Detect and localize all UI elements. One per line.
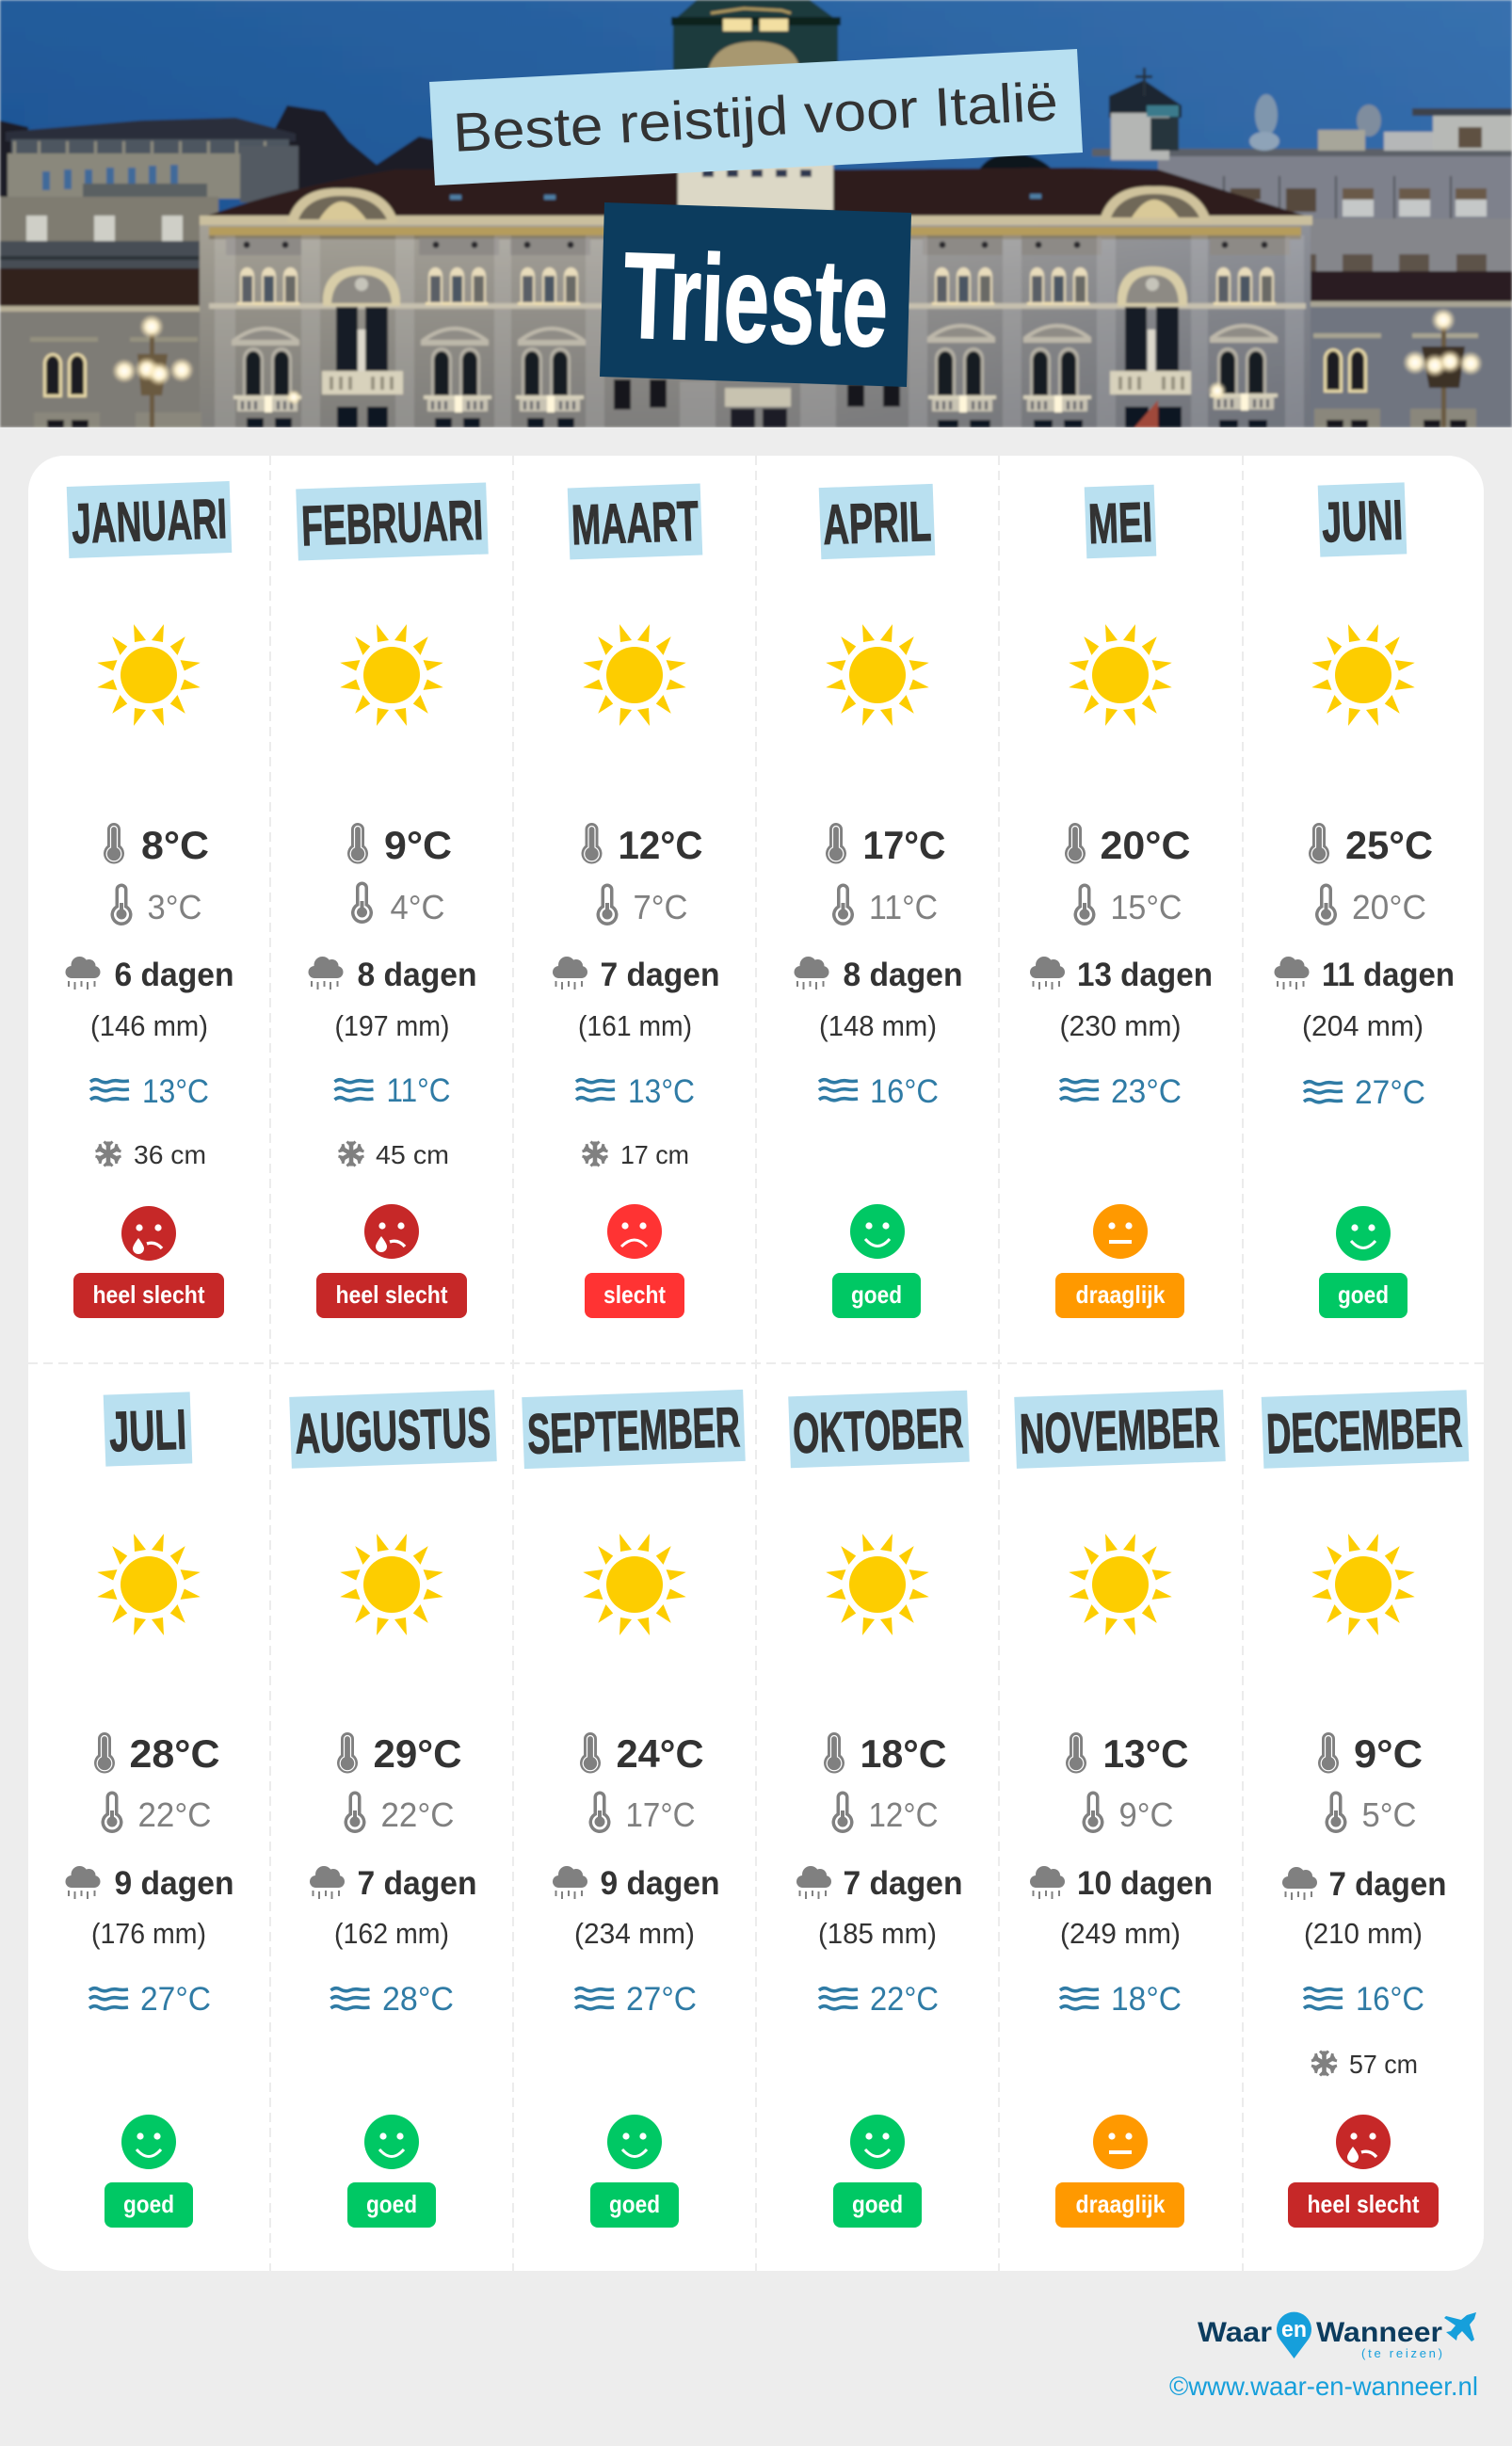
- panel: juli: [66, 1392, 233, 2228]
- sea temperature: [335, 1072, 450, 1109]
- sea temperature: 16°C: [1356, 1981, 1424, 2018]
- logo: Waar en Wanneer: Wanneer: [1316, 2317, 1442, 2348]
- min temperature: [597, 883, 687, 926]
- panel: december: [1262, 1390, 1469, 2228]
- max temperature: 24°C: [616, 1731, 704, 1776]
- max temperature: [104, 823, 209, 867]
- rainfall: (210 mm): [1304, 1917, 1423, 1950]
- panel: climate table card: [28, 456, 1484, 2271]
- rating face: [850, 2115, 905, 2169]
- icon: sun: [1311, 624, 1415, 726]
- max temperature: 9°C: [384, 823, 452, 867]
- subtitle banner: [429, 49, 1083, 185]
- min temperature: 22°C: [137, 1795, 211, 1834]
- icon: sun: [1069, 624, 1172, 726]
- icon: sun: [340, 624, 443, 726]
- min temperature: [102, 1791, 211, 1834]
- logo: Waar en Wanneer: (te reizen): [1361, 2346, 1442, 2360]
- panel: november: [1014, 1390, 1226, 2228]
- title banner: [600, 202, 911, 387]
- rating badge: [1055, 1273, 1184, 1318]
- rating badge: [105, 2182, 193, 2228]
- month label: augustus: AUGUSTUS: [294, 1395, 491, 1466]
- rating badge: draaglijk: [1075, 1280, 1166, 1309]
- min temperature: 20°C: [1352, 888, 1426, 926]
- sea temperature: [331, 1981, 454, 2018]
- rating badge: [832, 1273, 921, 1318]
- rating face: [1336, 2115, 1391, 2169]
- rainfall: (185 mm): [818, 1917, 937, 1950]
- sea temperature: 23°C: [1111, 1073, 1182, 1110]
- snow: 45 cm: [376, 1140, 449, 1169]
- rain days: 13 dagen: [1077, 957, 1213, 993]
- panel: maart: [553, 484, 719, 1318]
- rain days: 8 dagen: [358, 957, 476, 993]
- month label: november: [1014, 1390, 1226, 1469]
- sea temperature: 27°C: [140, 1981, 211, 2018]
- min temperature: 22°C: [380, 1795, 454, 1834]
- month label: juli: [104, 1392, 192, 1467]
- rating badge: goed: [851, 1280, 902, 1309]
- rating face: [364, 1204, 419, 1259]
- min temperature: 5°C: [1361, 1795, 1416, 1834]
- rating badge: [73, 1273, 224, 1318]
- rating face: [121, 1206, 176, 1261]
- rating badge: [1055, 2182, 1184, 2228]
- rainfall: (162 mm): [334, 1917, 449, 1950]
- rain days: [1282, 1866, 1446, 1903]
- min temperature: [589, 1791, 695, 1834]
- max temperature: [826, 823, 945, 867]
- max temperature: [1066, 1731, 1188, 1776]
- sea temperature: [1304, 1074, 1425, 1111]
- max temperature: 20°C: [1100, 823, 1190, 867]
- max temperature: 25°C: [1345, 823, 1433, 867]
- rain days: 7 dagen: [844, 1865, 962, 1902]
- snow: [582, 1140, 689, 1169]
- sea temperature: 18°C: [1111, 1981, 1182, 2018]
- min temperature: [1083, 1791, 1173, 1834]
- rainfall: (249 mm): [1060, 1917, 1181, 1950]
- rain days: 8 dagen: [844, 957, 962, 993]
- rating badge: goed: [609, 2190, 660, 2218]
- max temperature: [582, 823, 702, 867]
- panel: augustus: [289, 1390, 497, 2228]
- min temperature: 9°C: [1118, 1795, 1173, 1834]
- icon: sun: [583, 624, 686, 726]
- icon: sun: [583, 1534, 686, 1635]
- rain days: 7 dagen: [1329, 1866, 1446, 1903]
- snow: [95, 1140, 206, 1169]
- month label: juni: JUNI: [1321, 489, 1404, 554]
- rain days: 9 dagen: [601, 1865, 719, 1902]
- rating badge: heel slecht: [1307, 2190, 1420, 2218]
- max temperature: [347, 823, 452, 867]
- panel: januari: [66, 481, 233, 1318]
- logo: Waar en Wanneer: [1198, 2312, 1476, 2360]
- snow: 36 cm: [134, 1140, 206, 1169]
- icon: map pin: [1277, 2312, 1311, 2358]
- sea temperature: [1304, 1981, 1424, 2018]
- min temperature: [832, 883, 938, 926]
- rain days: 7 dagen: [601, 957, 719, 993]
- rating badge: goed: [123, 2190, 174, 2218]
- month label: februari: FEBRUARI: [300, 489, 484, 557]
- sea temperature: 27°C: [626, 1981, 697, 2018]
- max temperature: 13°C: [1103, 1731, 1188, 1776]
- month label: maart: MAART: [571, 490, 700, 556]
- month label: oktober: OKTOBER: [792, 1396, 964, 1465]
- rating badge: heel slecht: [335, 1280, 448, 1309]
- month label: oktober: [788, 1391, 970, 1468]
- max temperature: 18°C: [861, 1731, 947, 1776]
- month label: mei: [1085, 485, 1156, 558]
- rating face: [1336, 1206, 1391, 1261]
- rating face: [607, 1204, 662, 1259]
- rating badge: draaglijk: [1075, 2190, 1166, 2218]
- rating badge: [1288, 2182, 1439, 2228]
- min temperature: 11°C: [869, 888, 938, 926]
- sea temperature: [89, 1981, 211, 2018]
- sea temperature: 28°C: [382, 1981, 454, 2018]
- sea temperature: [576, 1073, 695, 1110]
- max temperature: 29°C: [373, 1731, 461, 1776]
- month label: januari: JANUARI: [71, 487, 228, 555]
- rain days: [553, 1865, 719, 1902]
- rating face: [607, 2115, 662, 2169]
- rainfall: (234 mm): [574, 1917, 695, 1950]
- rainfall: (146 mm): [90, 1009, 208, 1042]
- panel: oktober: [788, 1391, 970, 2228]
- rain days: [310, 1865, 476, 1902]
- rain days: 11 dagen: [1322, 957, 1455, 993]
- min temperature: 12°C: [868, 1795, 938, 1834]
- month label: maart: [568, 484, 702, 559]
- rain days: [66, 957, 233, 993]
- min temperature: 17°C: [625, 1795, 695, 1834]
- sea temperature: [819, 1981, 939, 2018]
- panel: juni: [1275, 482, 1455, 1318]
- sea temperature: [1060, 1073, 1182, 1110]
- min temperature: [1315, 883, 1426, 926]
- sea temperature: [90, 1073, 209, 1110]
- min temperature: [1326, 1791, 1416, 1834]
- month label: november: NOVEMBER: [1019, 1395, 1220, 1466]
- rain days: [795, 957, 962, 993]
- sea temperature: 13°C: [628, 1073, 695, 1110]
- icon: sun: [340, 1534, 443, 1635]
- sea temperature: 27°C: [1355, 1074, 1425, 1111]
- min temperature: [1073, 883, 1182, 926]
- min temperature: 3°C: [147, 888, 201, 926]
- rainfall: (176 mm): [91, 1917, 206, 1950]
- min temperature: 4°C: [390, 888, 444, 926]
- rain days: 7 dagen: [358, 1865, 476, 1902]
- rating face: [364, 2115, 419, 2169]
- rating badge: [1319, 1273, 1407, 1318]
- min temperature: [345, 1791, 454, 1834]
- max temperature: [824, 1731, 947, 1776]
- icon: sun: [826, 1534, 929, 1635]
- month label: augustus: [289, 1390, 497, 1469]
- rating badge: [585, 1273, 684, 1318]
- icon: sun: [97, 1534, 201, 1635]
- rating badge: goed: [852, 2190, 903, 2218]
- month label: april: APRIL: [822, 490, 932, 556]
- panel: april: [795, 484, 962, 1318]
- sea temperature: [1060, 1981, 1182, 2018]
- month label: februari: [296, 482, 489, 561]
- icon: sun: [97, 624, 201, 726]
- rain days: [553, 957, 719, 993]
- logo: Waar en Wanneer: Waar: [1198, 2317, 1272, 2348]
- website credit: ©www.waar-en-wanneer.nl: [1169, 2372, 1478, 2401]
- month label: juni: [1318, 482, 1407, 557]
- rain days: [66, 1865, 233, 1902]
- snow: [1311, 2050, 1418, 2079]
- panel: september: [522, 1390, 746, 2228]
- rating face: [1093, 1204, 1148, 1259]
- rating badge: heel slecht: [92, 1280, 205, 1309]
- month label: mei: MEI: [1087, 491, 1153, 555]
- header photo: Piazza Unità building at dusk: [0, 0, 1512, 427]
- sea temperature: [819, 1073, 939, 1110]
- rainfall: (204 mm): [1302, 1009, 1424, 1042]
- rain days: 6 dagen: [115, 957, 233, 993]
- rainfall: (161 mm): [578, 1009, 692, 1042]
- max temperature: 12°C: [618, 823, 702, 867]
- subtitle text: Beste reistijd voor Italië: [452, 71, 1059, 164]
- month label: september: SEPTEMBER: [526, 1395, 741, 1466]
- sea temperature: 22°C: [870, 1981, 939, 2018]
- rating badge: [590, 2182, 679, 2228]
- rating badge: goed: [366, 2190, 417, 2218]
- rating badge: goed: [1338, 1280, 1389, 1309]
- title text: Trieste: Trieste: [621, 226, 891, 373]
- rating badge: [316, 1273, 467, 1318]
- sea temperature: 13°C: [142, 1073, 209, 1110]
- icon: map pin: en: [1281, 2317, 1307, 2342]
- snow: [338, 1140, 449, 1169]
- max temperature: 8°C: [141, 823, 209, 867]
- panel: mei: [1030, 485, 1213, 1318]
- min temperature: [351, 881, 444, 926]
- month label: januari: [67, 481, 232, 558]
- sea temperature: 11°C: [386, 1072, 450, 1109]
- min temperature: 15°C: [1111, 888, 1182, 926]
- panel: februari: [296, 482, 489, 1318]
- sea temperature: 16°C: [870, 1073, 939, 1110]
- rainfall: (197 mm): [335, 1009, 450, 1042]
- rainfall: (148 mm): [819, 1009, 937, 1042]
- min temperature: [832, 1791, 938, 1834]
- max temperature: 17°C: [862, 823, 945, 867]
- rain days: [796, 1865, 962, 1902]
- rating face: [121, 2115, 176, 2169]
- rating face: [850, 1204, 905, 1259]
- month label: juli: JULI: [108, 1398, 187, 1463]
- snow: 57 cm: [1349, 2050, 1418, 2079]
- max temperature: 28°C: [130, 1731, 220, 1776]
- max temperature: [1318, 1731, 1423, 1776]
- snow: 17 cm: [620, 1140, 689, 1169]
- rating badge: slecht: [603, 1280, 666, 1309]
- rain days: [309, 957, 476, 993]
- rating badge: [833, 2182, 922, 2228]
- min temperature: [111, 883, 201, 926]
- min temperature: 7°C: [633, 888, 687, 926]
- month label: september: [522, 1390, 746, 1469]
- icon: airplane: [1444, 2312, 1476, 2341]
- rating face: [1093, 2115, 1148, 2169]
- max temperature: 9°C: [1354, 1731, 1423, 1776]
- rain days: 10 dagen: [1077, 1865, 1213, 1902]
- icon: sun: [1311, 1534, 1415, 1635]
- icon: sun: [1069, 1534, 1172, 1635]
- month label: april: [819, 484, 935, 559]
- icon: sun: [826, 624, 929, 726]
- rainfall: (230 mm): [1060, 1009, 1181, 1042]
- sea temperature: [575, 1981, 697, 2018]
- rain days: 9 dagen: [115, 1865, 233, 1902]
- rating badge: [347, 2182, 436, 2228]
